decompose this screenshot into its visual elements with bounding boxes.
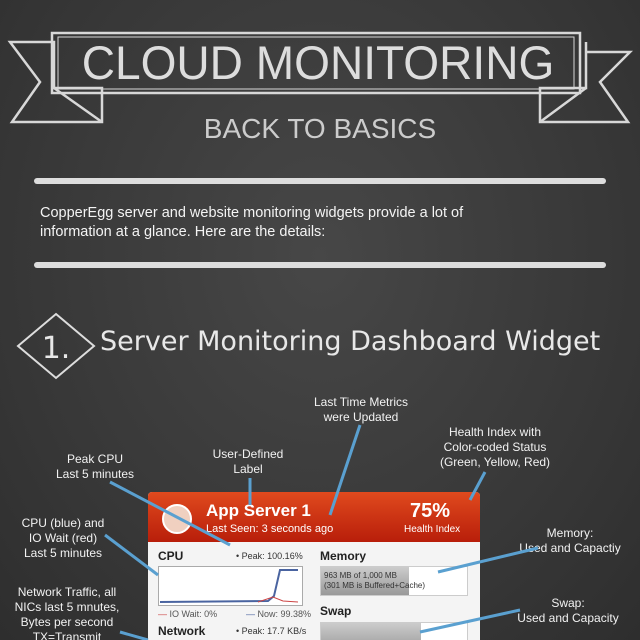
text: Memory: [547,526,593,540]
widget: Swap [320,604,351,618]
widget header: Last Seen: 3 seconds ago [206,523,333,535]
widget header: 75% [410,500,450,522]
text: Health Index with [449,425,541,439]
section heading: Server Monitoring Dashboard Widget [100,326,600,357]
text: Last 5 minutes [56,467,134,481]
intro text: information at a glance. Here are the details: [40,224,325,240]
widget: (301 MB is Buffered+Cache) [324,581,425,590]
widget: 963 MB of 1,000 MB [324,571,397,580]
widget: — Now: 99.38% [246,609,311,619]
widget: • Peak: 100.16% [236,551,303,561]
text: Color-coded Status [444,440,546,454]
widget header: App Server 1 [206,501,311,520]
text: NICs last 5 mnutes, [15,600,119,614]
memory: Memory [320,549,366,563]
widget header [148,492,480,542]
text: User-Defined [213,447,283,461]
icon: number diamond [16,312,96,380]
text: Label [233,462,263,476]
text: Used and Capactiy [519,541,621,555]
widget: — IO Wait: 0% [158,609,217,619]
text: IO Wait (red) [29,531,97,545]
callout labels: Last Time Metrics [314,395,408,409]
text: Last 5 minutes [24,546,102,560]
subtitle: BACK TO BASICS [204,113,436,144]
widget [148,492,480,640]
intro text [40,205,464,240]
text: Swap: [551,596,585,610]
callout labels: were Updated [324,410,398,424]
text: Used and Capacity [517,611,619,625]
intro text: CopperEgg server and website monitoring widgets provide a lot of [40,205,463,221]
text: Bytes per second [21,615,113,629]
section heading [16,312,600,380]
text: CPU (blue) and [22,516,104,530]
text: Network Traffic, all [18,585,116,599]
banner ribbon [8,32,633,124]
text: Peak CPU [67,452,123,466]
title: CLOUD MONITORING [82,36,554,89]
widget: • Peak: 17.7 KB/s [236,626,306,636]
cpu chart: CPU [158,549,183,563]
callout labels [314,395,408,424]
widget: Network [158,624,205,638]
text: (Green, Yellow, Red) [440,455,550,469]
icon: number diamond: 1. [42,331,70,366]
widget header: Health Index [404,524,460,535]
